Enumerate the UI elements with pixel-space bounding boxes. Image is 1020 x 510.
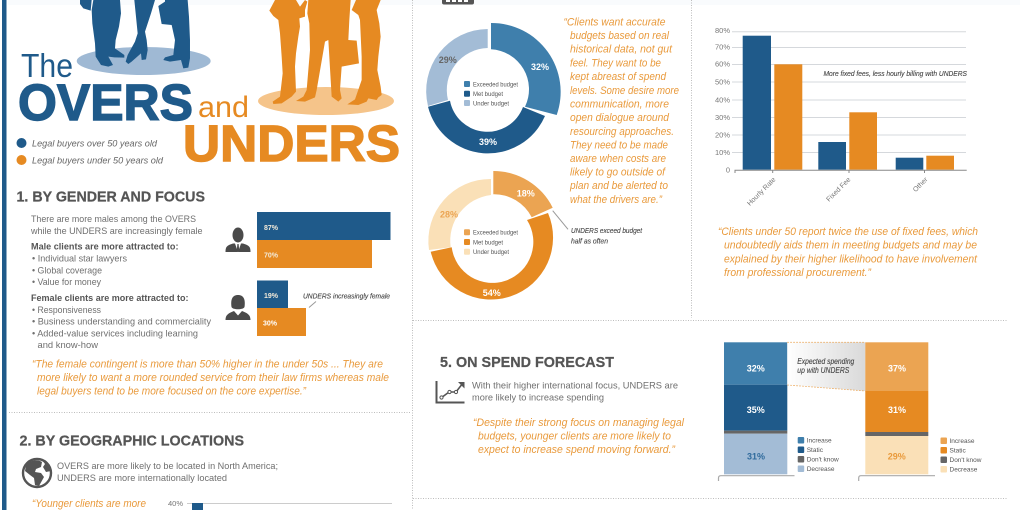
text block: gender attractions: • Value for money xyxy=(32,277,101,288)
bar chart: gender share: 30% xyxy=(263,320,278,328)
title: The xyxy=(21,47,73,84)
quote xyxy=(564,16,679,206)
quote: feel. They want to be xyxy=(570,58,661,70)
legend: Legal buyers under 50 years old xyxy=(32,156,164,166)
callout: expected spending up with unders: up with UNDERS xyxy=(797,366,850,375)
donut chart: unders budget: 28% xyxy=(440,210,458,220)
quote: likely to go outside of xyxy=(570,166,666,178)
legend: unders spending xyxy=(940,438,982,474)
quote: resourcing approaches. xyxy=(570,126,674,138)
quote: “Clients under 50 report twice the use of fixed fees, which xyxy=(718,226,978,238)
quote: “Clients want accurate xyxy=(564,16,666,28)
illustration: blue silhouettes of over-50 buyers xyxy=(77,0,211,75)
legend: overs spending xyxy=(798,437,839,473)
title: OVERS xyxy=(18,74,193,131)
bar chart: fee types: Fixed Fee xyxy=(825,176,852,203)
stacked bars: overs spending: 35% xyxy=(747,405,765,415)
callout: unders exceed budget: UNDERS exceed budget xyxy=(571,226,643,235)
donut chart: overs budget: Under budget xyxy=(473,100,509,108)
stacked bars: overs spending: 31% xyxy=(747,452,765,462)
legend: overs spending: Don't know xyxy=(807,456,839,464)
bar chart: gender share xyxy=(257,212,390,336)
legend: overs spending: Static xyxy=(807,447,824,454)
donut chart: unders budget xyxy=(428,171,553,300)
bar chart: gender share: 70% xyxy=(264,252,279,260)
bar chart: fee types: 20% xyxy=(715,130,730,140)
legend: unders spending: Static xyxy=(950,448,967,454)
text block: geography: OVERS are more likely to be located in North America; xyxy=(57,461,278,472)
quote xyxy=(473,417,685,456)
bar chart: fee types: 30% xyxy=(715,113,730,122)
callout: unders increasingly female xyxy=(303,294,390,308)
panel: budget donuts xyxy=(426,0,679,300)
bar chart: fee types: Hourly Rate xyxy=(746,176,777,208)
quote: legal buyers tend to be more focused on the core expertise.” xyxy=(37,386,307,398)
quote: undoubtedly aids them in meeting budgets and may be xyxy=(724,240,977,252)
quote: what the drivers are.” xyxy=(570,194,663,206)
heading: 2. BY GEOGRAPHIC LOCATIONS xyxy=(20,432,244,450)
text block: spend forecast: With their higher international focus, UNDERS are xyxy=(472,380,678,392)
stacked bars: unders spending: 29% xyxy=(888,452,906,462)
donut chart: unders budget: Met budget xyxy=(473,239,503,246)
quote: plan and be alerted to xyxy=(569,180,668,192)
panel: title header xyxy=(16,0,400,172)
quote: “Despite their strong focus on managing legal xyxy=(473,417,685,429)
text block: gender attractions: Male clients are more attracted to: xyxy=(31,242,178,252)
text block: gender attractions xyxy=(30,214,211,351)
quote: open dialogue around xyxy=(570,112,670,124)
callout: unders exceed budget: half as often xyxy=(571,236,608,246)
stacked bars: unders spending: 37% xyxy=(888,364,906,374)
quote xyxy=(718,226,978,279)
quote: explained by their higher likelihood to have involvement xyxy=(724,254,978,266)
text block: gender attractions: • Added-value services including learning xyxy=(32,328,198,340)
callout: unders exceed budget xyxy=(553,211,643,246)
bar chart: gender share: 19% xyxy=(264,293,279,300)
panel: 2. by geographic locations xyxy=(20,432,392,510)
title: UNDERS xyxy=(183,115,400,172)
text block: gender attractions: • Individual star lawyers xyxy=(32,254,127,264)
callout: expected spending up with unders xyxy=(787,342,865,391)
donut chart: overs budget: 39% xyxy=(479,137,497,147)
bar chart: fee types: 40% xyxy=(715,96,730,104)
quote: historical data, not gut xyxy=(570,44,673,56)
panel: 1. by gender and focus xyxy=(16,188,390,398)
legend: unders spending: Don't know xyxy=(950,457,982,464)
text block: spend forecast xyxy=(472,380,678,404)
quote: more likely to want a more rounded service from their law firms whereas male xyxy=(37,372,389,384)
title: and xyxy=(198,91,249,124)
donut chart: overs budget: 29% xyxy=(439,55,457,65)
bar chart: fee types: 10% xyxy=(715,148,730,157)
callout: unders increasingly female: UNDERS increasingly female xyxy=(303,294,390,300)
quote: communication, more xyxy=(570,98,669,110)
heading: 1. BY GENDER AND FOCUS xyxy=(16,188,205,206)
quote: kept abreast of spend xyxy=(570,71,667,83)
legend: overs spending: Decrease xyxy=(807,466,835,473)
legend xyxy=(16,138,164,166)
legend: unders spending: Decrease xyxy=(950,466,978,474)
callout: expected spending up with unders: Expected spending xyxy=(797,357,855,366)
bar chart: fee types: 80% xyxy=(715,26,730,35)
title xyxy=(18,47,400,172)
donut chart: unders budget: 18% xyxy=(517,188,535,198)
bar chart: fee types: 60% xyxy=(715,60,730,68)
quote: They need to be made xyxy=(570,140,668,152)
text block: gender attractions: Female clients are more attracted to: xyxy=(31,293,188,304)
donut chart: overs budget xyxy=(426,23,561,153)
legend: overs spending: Increase xyxy=(807,438,832,444)
text block: spend forecast: more likely to increase spending xyxy=(472,392,604,404)
panel: billing chart xyxy=(715,26,978,279)
quote: budgets based on real xyxy=(570,30,669,42)
icon: male client xyxy=(226,228,250,252)
bar chart: geography: 40% xyxy=(168,499,183,508)
donut chart: unders budget: Exceeded budget xyxy=(473,230,518,236)
bar chart: fee types: Other xyxy=(912,176,930,194)
donut chart: overs budget: Met budget xyxy=(473,91,503,98)
text block: gender attractions: • Business understanding and commerciality xyxy=(32,316,211,328)
quote: levels. Some desire more xyxy=(570,85,679,97)
text block: gender attractions: There are more males among the OVERS xyxy=(31,214,196,225)
bar chart: fee types: 70% xyxy=(715,42,730,52)
quote xyxy=(32,358,389,398)
stacked bars: unders spending xyxy=(859,342,935,481)
bar chart: fee types: 0 xyxy=(726,166,730,174)
bar chart: geography xyxy=(168,499,392,510)
donut chart: unders budget: Under budget xyxy=(473,249,509,256)
quote: budgets, younger clients are more likely to xyxy=(478,430,671,442)
illustration: orange silhouettes of under-50 buyers xyxy=(258,0,394,115)
quote: “Younger clients are more xyxy=(32,498,146,510)
icon: rising chart xyxy=(436,381,464,402)
icon: female client xyxy=(226,295,250,320)
quote: “The female contingent is more than 50% higher in the under 50s ... They are xyxy=(32,358,383,370)
text block: geography xyxy=(57,461,278,484)
icon: section marker xyxy=(442,0,474,4)
legend: Legal buyers over 50 years old xyxy=(32,138,158,150)
bar chart: gender share: 87% xyxy=(264,225,279,232)
quote: from professional procurement.” xyxy=(724,267,872,279)
bar chart: fee types xyxy=(715,26,967,208)
text block: gender attractions: • Responsiveness xyxy=(32,305,101,316)
panel: 5. on spend forecast xyxy=(436,342,982,481)
quote: expect to increase spend moving forward.” xyxy=(478,444,676,456)
text block: gender attractions: and know-how xyxy=(38,340,98,351)
text block: gender attractions: • Global coverage xyxy=(32,266,102,276)
donut chart: overs budget: 32% xyxy=(531,62,549,72)
stacked bars: overs spending: 32% xyxy=(747,364,765,374)
legend: unders spending: Increase xyxy=(950,438,975,445)
stacked bars: overs spending xyxy=(718,342,794,481)
icon: globe xyxy=(23,459,51,487)
bar chart: fee types: More fixed fees, less hourly billing with UNDERS xyxy=(824,69,967,78)
donut chart: overs budget: Exceeded budget xyxy=(473,82,518,88)
stacked bars: unders spending: 31% xyxy=(888,405,906,415)
text block: geography: UNDERS are more internationally located xyxy=(57,473,227,484)
donut chart: unders budget: 54% xyxy=(483,288,501,298)
heading: 5. ON SPEND FORECAST xyxy=(440,354,614,371)
quote: aware when costs are xyxy=(570,153,666,165)
bar chart: fee types: 50% xyxy=(715,78,730,86)
text block: gender attractions: while the UNDERS are increasingly female xyxy=(30,226,202,237)
